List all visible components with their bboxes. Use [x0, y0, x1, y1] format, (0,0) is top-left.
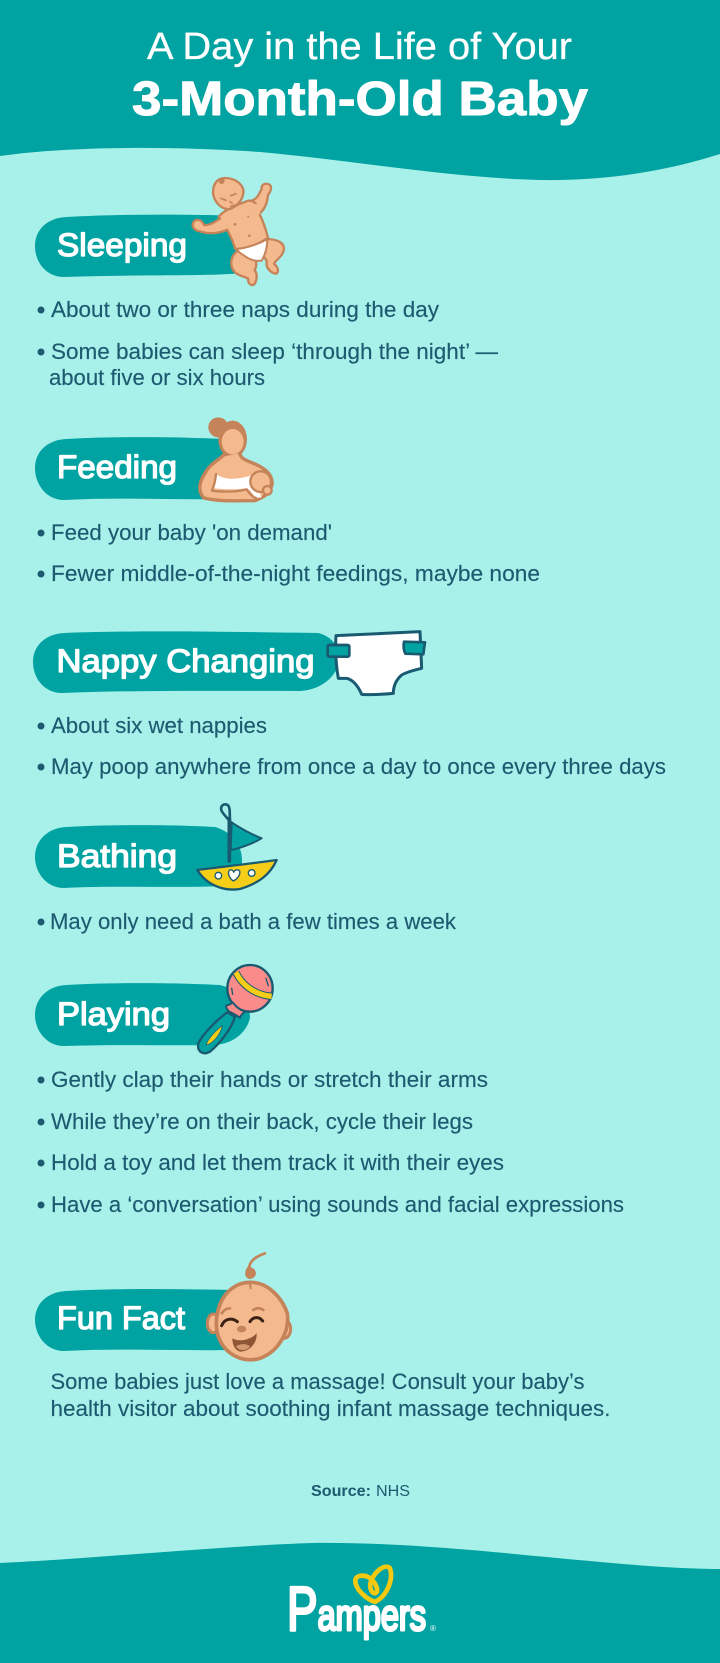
panel: bathing — [35, 804, 457, 934]
logo: Pampers — [287, 1567, 436, 1644]
bullet list: nappy changing — [38, 713, 666, 779]
footer banner — [0, 1543, 720, 1663]
fun fact text: health visitor about soothing infant massage techniques. — [50, 1396, 610, 1421]
panel: nappy changing — [33, 631, 666, 779]
bullet list: bathing: May only need a bath a few times a week — [50, 909, 457, 934]
bullet list: sleeping: About two or three naps during the day — [51, 297, 439, 322]
bullet list: playing: Gently clap their hands or stretch their arms — [51, 1067, 488, 1092]
source line: NHS — [376, 1483, 410, 1500]
heading pill: fun fact — [35, 1289, 235, 1351]
heading: bathing: Bathing — [57, 838, 177, 874]
wordmark: Pampers — [287, 1575, 426, 1644]
panel: playing — [35, 965, 624, 1217]
bullet list: sleeping: Some babies can sleep ‘through the night’ — — [51, 339, 498, 364]
bullet list: sleeping — [38, 297, 498, 390]
heading: sleeping: Sleeping — [57, 227, 187, 263]
heading pill: feeding — [35, 437, 225, 500]
footer wave — [0, 1543, 720, 1663]
icon: sleeping baby — [193, 178, 284, 285]
bullet list: playing: Have a ‘conversation’ using sounds and facial expressions — [51, 1192, 624, 1217]
heading: playing: Playing — [57, 996, 170, 1032]
icon: mother feeding baby — [200, 417, 272, 501]
panel: feeding — [35, 417, 540, 586]
bullet list: feeding: Feed your baby 'on demand' — [51, 520, 332, 545]
registered mark: ® — [430, 1624, 436, 1633]
source line — [311, 1483, 410, 1500]
icon: rattle — [198, 965, 273, 1053]
bullet list: nappy changing: About six wet nappies — [51, 713, 267, 738]
bullet list: feeding — [38, 520, 540, 586]
heading pill: nappy changing — [33, 631, 340, 693]
heading: fun fact: Fun Fact — [57, 1300, 185, 1336]
title — [132, 26, 588, 126]
bullet list: playing — [38, 1067, 624, 1217]
heading: feeding: Feeding — [57, 449, 177, 485]
heading: nappy changing: Nappy Changing — [56, 643, 314, 679]
bullet list: sleeping: about five or six hours — [49, 365, 265, 390]
bullet list: playing: While they’re on their back, cycle their legs — [51, 1109, 473, 1134]
bullet list: feeding: Fewer middle-of-the-night feedings, maybe none — [51, 561, 540, 586]
title line 2: 3-Month-Old Baby — [132, 73, 588, 126]
heading pill: bathing — [35, 825, 242, 888]
fun fact text: Some babies just love a massage! Consult your baby’s — [50, 1369, 584, 1394]
source line: Source: — [311, 1483, 371, 1500]
icon: nappy — [328, 632, 425, 695]
bullet list: playing: Hold a toy and let them track it with their eyes — [51, 1150, 504, 1175]
fun fact text — [50, 1369, 610, 1421]
heading pill: playing — [35, 983, 250, 1046]
panel: fun fact — [35, 1253, 610, 1421]
panel: sleeping — [35, 178, 498, 390]
icon: toy boat — [197, 804, 277, 890]
bullet list: nappy changing: May poop anywhere from once a day to once every three days — [51, 754, 666, 779]
title line 1: A Day in the Life of Your — [147, 26, 572, 68]
heading pill: sleeping — [35, 215, 250, 277]
icon: heart — [355, 1567, 391, 1602]
header banner — [0, 0, 720, 180]
icon: smiling baby face — [207, 1253, 291, 1360]
header wave — [0, 0, 720, 180]
